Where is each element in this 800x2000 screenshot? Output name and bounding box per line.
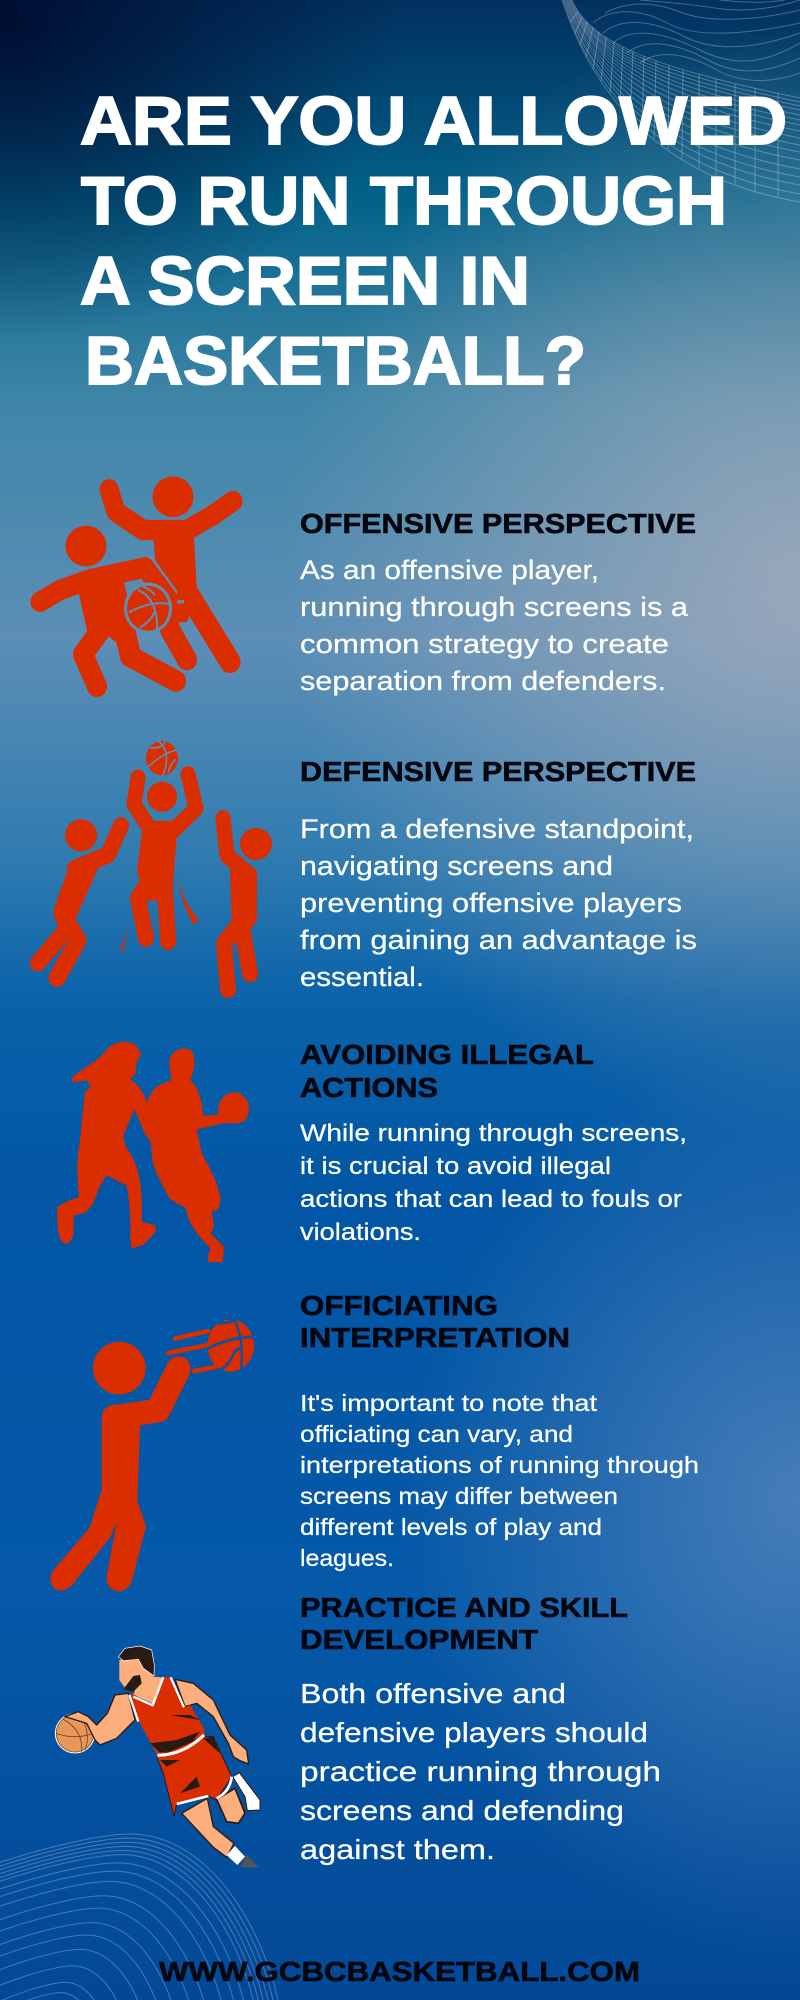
front player [40,526,184,686]
heading: INTERPRETATION [300,1322,570,1353]
body text: interpretations of running through [300,1452,699,1478]
shorts [157,1737,232,1817]
body text: screens and defending [300,1795,624,1826]
body text: It's important to note that [300,1390,598,1416]
body text: actions that can lead to fouls or [300,1186,682,1213]
basketball [146,741,178,775]
icon: defensive perspective, three players [38,741,272,990]
heading: OFFICIATING [300,1290,498,1321]
body text: As an offensive player, [300,555,599,585]
heading: OFFENSIVE PERSPECTIVE [300,508,696,539]
body text: essential. [300,962,424,992]
body text [300,1390,699,1571]
body text: From a defensive standpoint, [300,814,694,844]
heading: ACTIONS [300,1072,438,1103]
center player [120,774,199,951]
body text [300,814,697,992]
title: BASKETBALL? [85,323,586,399]
body text: defensive players should [300,1717,648,1748]
neck [133,1676,163,1704]
title: A SCREEN IN [80,243,530,319]
body text: common strategy to create [300,629,669,659]
heading: PRACTICE AND SKILL [300,1592,628,1623]
head [119,1657,154,1689]
heading: AVOIDING ILLEGAL [300,1039,594,1070]
body text: practice running through [300,1756,661,1787]
body text: Both offensive and [300,1678,566,1709]
heading: DEVELOPMENT [300,1624,538,1655]
body text [300,1120,687,1246]
body text: running through screens is a [300,592,689,622]
footer website: WWW.GCBCBASKETBALL.COM [159,1956,640,1987]
body text: preventing offensive players [300,888,682,918]
heading [300,1592,628,1655]
section: offensive perspective [300,508,696,696]
icon: two player silhouettes [57,1042,249,1262]
title: TO RUN THROUGH [81,163,727,239]
body text [300,1678,661,1865]
title [80,83,787,399]
body text [300,555,689,696]
section: practice and skill development [300,1592,661,1865]
back arm and legs [175,1679,260,1867]
jersey [128,1677,205,1754]
body text: violations. [300,1219,421,1246]
front arm [65,1693,135,1745]
body text: different levels of play and [300,1514,602,1540]
illustration: dribbling player [55,1646,260,1867]
back jumping player [109,476,233,662]
heading [300,1290,570,1353]
body text: separation from defenders. [300,666,666,696]
heading: DEFENSIVE PERSPECTIVE [300,756,696,787]
title: ARE YOU ALLOWED [80,83,787,159]
body text: against them. [300,1834,495,1865]
body text: screens may differ between [300,1483,618,1509]
left player [38,819,121,978]
body text: it is crucial to avoid illegal [300,1153,611,1180]
body text: While running through screens, [300,1120,687,1147]
body text: leagues. [300,1545,394,1571]
body text: officiating can vary, and [300,1421,573,1447]
basketball [55,1714,95,1753]
body text: navigating screens and [300,851,613,881]
right player [223,818,272,990]
basketball [124,582,172,634]
section: avoiding illegal actions [300,1039,687,1246]
flying basketball [168,1319,255,1373]
icon: player shooting ball [50,1319,255,1591]
section: defensive perspective [300,756,697,992]
heading [300,1039,594,1103]
body text: from gaining an advantage is [300,925,697,955]
icon: offensive perspective, two players colliding [40,476,233,686]
section: officiating interpretation [300,1290,699,1571]
